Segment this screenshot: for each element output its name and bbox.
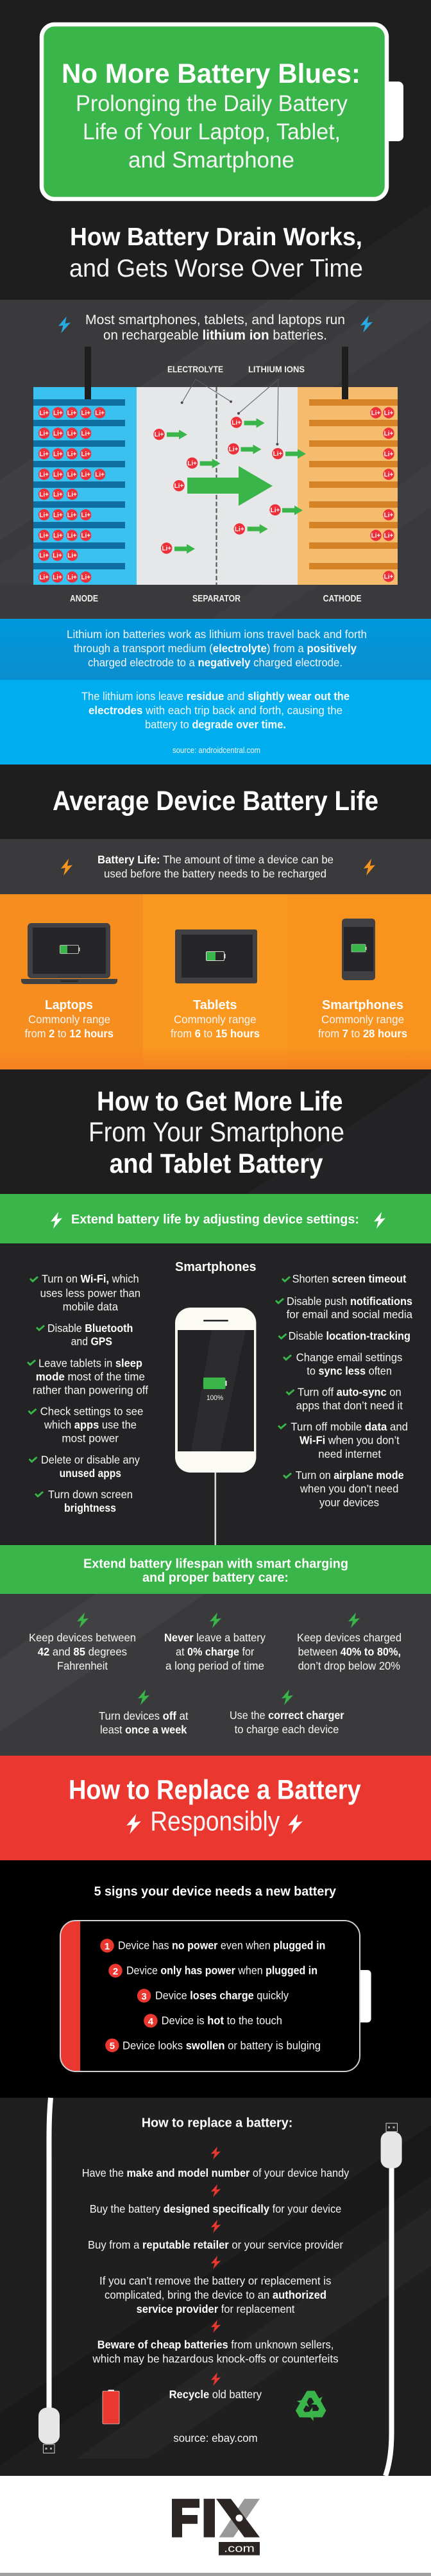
sign 2: 2	[113, 1966, 118, 1977]
right checklist: Turn off mobile data and	[291, 1420, 408, 1433]
separator block	[137, 387, 298, 585]
icon: white bolt right	[374, 1212, 385, 1229]
definition text: used before the battery needs to be recharged	[104, 867, 326, 880]
heading: how battery drain works: How Battery Drain Works,	[70, 223, 362, 251]
cathode block	[298, 387, 398, 585]
anode lithium ions: Li+	[53, 533, 63, 539]
diagram labels: SEPARATOR	[192, 593, 241, 604]
banner: adjust device settings	[0, 1194, 431, 1243]
moving ions with arrows: Li+	[232, 420, 241, 426]
anode lithium ions: Li+	[39, 552, 49, 560]
icon: tablet	[175, 929, 257, 983]
anode lithium ions: Li+	[39, 533, 49, 539]
heading: how to get more life	[0, 1069, 431, 1194]
smartphones text: Smartphones	[322, 998, 403, 1012]
definition text: Battery Life: The amount of time a device can be	[97, 853, 334, 866]
icon: blue bolt right	[360, 316, 373, 333]
tip: correct charger: Use the correct charger	[230, 1709, 344, 1722]
tip: charge range	[297, 1612, 401, 1672]
moving ions with arrows: Li+	[174, 483, 184, 490]
separator dashed line	[216, 387, 217, 585]
cathode lithium ions: Li+	[371, 533, 381, 539]
right checklist: your devices	[319, 1496, 379, 1508]
smartphones text	[318, 998, 407, 1040]
right checklist: for email and social media	[287, 1308, 412, 1321]
left checklist: rather than powering off	[33, 1383, 148, 1396]
source: source: ebay.com	[173, 2432, 258, 2444]
icon: white phone	[175, 1308, 256, 1473]
cathode lithium ions: Li+	[384, 430, 394, 438]
tip: temperature: 42 and 85 degrees	[38, 1645, 127, 1658]
banner: smart charging	[0, 1545, 431, 1594]
terminals	[85, 347, 348, 399]
left checklist: Disable Bluetooth	[47, 1322, 133, 1335]
title text	[62, 58, 360, 173]
icon: recycle symbol	[292, 2390, 329, 2424]
sign 4: 4	[148, 2016, 154, 2027]
tip: turn off weekly	[99, 1690, 189, 1736]
banner text: Extend battery life by adjusting device settings:	[71, 1213, 359, 1227]
step 4: If you can’t remove the battery or replacement is	[99, 2274, 332, 2287]
anode lithium ions: Li+	[67, 492, 77, 498]
heading: how to get more life: How to Get More Life	[97, 1086, 342, 1117]
anode plates	[33, 399, 125, 569]
anode lithium ions: Li+	[67, 471, 77, 479]
left checklist: Leave tablets in sleep	[38, 1356, 142, 1369]
anode lithium ions: Li+	[53, 410, 63, 417]
laptops text: Laptops	[45, 998, 93, 1012]
cathode lithium ions: Li+	[371, 410, 381, 417]
heading: average device battery life	[0, 765, 431, 839]
moving ions with arrows: Li+	[235, 526, 244, 533]
panel: how lithium ion batteries work: through a transport medium (electrolyte) from a positively	[74, 642, 357, 655]
charging cable	[214, 1473, 216, 1545]
tip: temperature	[29, 1612, 136, 1672]
intro text: Most smartphones, tablets, and laptops run	[85, 313, 345, 327]
panel: electrode wear: battery to degrade over time.	[145, 718, 286, 731]
anode lithium ions: Li+	[39, 430, 49, 438]
diagram labels: CATHODE	[323, 593, 362, 604]
anode lithium ions: Li+	[95, 410, 105, 417]
right checklist: Turn on airplane mode	[296, 1469, 404, 1482]
anode lithium ions: Li+	[53, 574, 62, 582]
right checklist: Disable push notifications	[287, 1295, 412, 1308]
laptops text: from 2 to 12 hours	[24, 1027, 114, 1040]
tip: never zero charge: Never leave a battery	[164, 1631, 266, 1644]
icon: smartphone	[342, 919, 375, 980]
definition text	[97, 853, 334, 880]
signs heading: 5 signs your device needs a new battery	[94, 1885, 337, 1899]
source: source: androidcentral.com	[173, 745, 260, 755]
step 5: Beware of cheap batteries from unknown sellers,	[97, 2338, 334, 2351]
anode lithium ions: Li+	[67, 512, 77, 519]
tip: charge range: Keep devices charged	[297, 1631, 401, 1644]
left checklist: unused apps	[60, 1467, 121, 1480]
anode lithium ions: Li+	[67, 552, 77, 560]
icon: orange bolt right	[364, 859, 375, 876]
anode lithium ions: Li+	[81, 512, 90, 519]
cathode lithium ions: Li+	[384, 451, 394, 458]
smartphones text: Commonly range	[321, 1013, 404, 1026]
banner: smart charging: and proper battery care:	[142, 1571, 289, 1585]
tip: temperature: Fahrenheit	[57, 1659, 108, 1672]
left checklist: brightness	[64, 1501, 116, 1514]
tip: never zero charge: at 0% charge for	[176, 1645, 255, 1658]
leader lines	[181, 379, 278, 445]
sign 5: Device looks swollen or battery is bulging	[123, 2039, 321, 2052]
right checklist: Change email settings	[296, 1351, 403, 1363]
icon: white phone: 100%	[207, 1394, 223, 1402]
logo: FIX.com	[172, 2499, 260, 2555]
sign 1: Device has no power even when plugged in	[118, 1939, 325, 1952]
anode lithium ions: Li+	[39, 574, 49, 582]
moving ions with arrows: Li+	[229, 446, 239, 453]
step 4	[99, 2256, 332, 2315]
right checklist: Wi-Fi when you don’t	[300, 1434, 400, 1447]
panel: how lithium ion batteries work	[0, 619, 431, 680]
anode lithium ions: Li+	[53, 471, 63, 479]
icon: white bolt left	[126, 1814, 141, 1834]
banner: smart charging: Extend battery lifespan with smart charging	[83, 1557, 348, 1571]
panel: how lithium ion batteries work: charged electrode to a negatively charged electrode.	[88, 656, 342, 669]
diagram labels	[70, 364, 362, 604]
anode lithium ions: Li+	[53, 430, 63, 438]
panel: lithium ion diagram	[0, 300, 431, 619]
anode lithium ions: Li+	[39, 512, 49, 519]
left checklist: and GPS	[71, 1335, 112, 1348]
smartphones text: from 7 to 28 hours	[318, 1027, 407, 1040]
anode lithium ions: Li+	[81, 410, 90, 417]
heading: how battery drain works: and Gets Worse Over Time	[69, 255, 363, 282]
title battery	[42, 24, 403, 199]
panel: device battery life columns	[0, 894, 431, 1069]
left checklist: Turn down screen	[48, 1488, 133, 1501]
anode lithium ions: Li+	[67, 533, 77, 539]
cathode lithium ions: Li+	[384, 410, 394, 417]
right checklist: Turn off auto-sync on	[298, 1385, 401, 1398]
anode lithium ions: Li+	[81, 533, 90, 539]
sign 4: Device is hot to the touch	[162, 2014, 282, 2027]
tip: charge range: don’t drop below 20%	[298, 1659, 400, 1672]
panel: electrode wear: The lithium ions leave residue and slightly wear out the	[81, 690, 350, 703]
heading: how to replace a battery responsibly: How to Replace a Battery	[69, 1775, 361, 1806]
left checklist	[27, 1272, 148, 1514]
anode lithium ions: Li+	[39, 451, 49, 458]
sign 3: 3	[141, 1991, 147, 2002]
step 3	[88, 2220, 343, 2251]
cathode plates	[309, 399, 398, 569]
icon: white bolt right	[288, 1814, 303, 1834]
cathode lithium ions	[370, 407, 394, 582]
diagram labels: LITHIUM IONS	[248, 364, 305, 374]
cathode lithium ions: Li+	[384, 512, 394, 519]
step 4: complicated, bring the device to an authorized	[105, 2288, 326, 2301]
anode lithium ions: Li+	[67, 451, 77, 458]
icon: red battery	[103, 2390, 119, 2424]
tablets text: from 6 to 15 hours	[171, 1027, 260, 1040]
moving ions with arrows: Li+	[187, 460, 197, 467]
title text: and Smartphone	[128, 148, 294, 173]
cathode lithium ions: Li+	[384, 574, 394, 580]
icon: blue bolt left	[58, 316, 71, 333]
usb plug left	[38, 2408, 60, 2453]
left checklist: most power	[62, 1432, 119, 1445]
icon: laptop	[21, 923, 117, 984]
tip: never zero charge	[164, 1612, 266, 1672]
moving ions with arrows: Li+	[273, 451, 283, 458]
right checklist: Disable location-tracking	[289, 1329, 410, 1342]
anode lithium ions: Li+	[81, 471, 90, 479]
panel: header background	[0, 0, 431, 300]
panel: five signs	[0, 1860, 431, 2098]
tip: charge range: between 40% to 80%,	[298, 1645, 401, 1658]
step 6: Recycle old battery	[169, 2388, 262, 2401]
anode block	[33, 387, 137, 585]
step 3: Buy from a reputable retailer or your service provider	[88, 2238, 343, 2251]
right checklist: need internet	[318, 1448, 381, 1460]
right checklist: apps that don’t need it	[296, 1399, 403, 1412]
panel: how lithium ion batteries work: Lithium ion batteries work as lithium ions travel back and forth	[67, 628, 367, 641]
step 2: Buy the battery designed specifically for your device	[90, 2202, 341, 2215]
cathode lithium ions: Li+	[384, 471, 394, 479]
intro text	[85, 313, 345, 343]
cable right	[385, 2167, 391, 2476]
cathode lithium ions: Li+	[384, 533, 394, 539]
title text: Prolonging the Daily Battery	[76, 91, 348, 116]
anode lithium ions	[38, 407, 105, 583]
tip: temperature: Keep devices between	[29, 1631, 136, 1644]
step 1	[82, 2147, 350, 2179]
tablets text: Commonly range	[174, 1013, 257, 1026]
left checklist: mobile data	[63, 1301, 118, 1313]
tip: correct charger	[230, 1690, 344, 1736]
panel: electrode wear	[0, 680, 431, 765]
anode lithium ions: Li+	[81, 574, 90, 582]
left checklist: Check settings to see	[40, 1405, 143, 1418]
panel: how to replace steps	[0, 2098, 431, 2476]
right checklist	[275, 1272, 412, 1508]
diagram labels: ANODE	[70, 593, 98, 604]
moving ions with arrows: Li+	[162, 546, 171, 552]
sign 5: 5	[110, 2041, 115, 2052]
anode lithium ions: Li+	[53, 552, 62, 560]
panel: footer	[0, 2476, 431, 2576]
anode lithium ions: Li+	[67, 410, 77, 417]
step 4: service provider for replacement	[137, 2303, 295, 2315]
heading: how to get more life: and Tablet Battery	[110, 1148, 323, 1179]
icon: white bolt left	[51, 1212, 62, 1229]
left checklist: Turn on Wi-Fi, which	[42, 1272, 139, 1285]
battery outline with red charge	[60, 1921, 371, 2071]
step 6	[169, 2373, 262, 2401]
anode lithium ions: Li+	[67, 430, 77, 438]
cable left	[49, 2098, 51, 2408]
logo: FIX.com: .com	[224, 2542, 255, 2555]
tablets text	[171, 998, 260, 1040]
heading: how to get more life: From Your Smartphone	[89, 1117, 344, 1148]
icon: orange bolt left	[61, 859, 72, 876]
sign 1: 1	[105, 1941, 110, 1952]
step 5	[92, 2320, 339, 2365]
left checklist: which apps use the	[44, 1419, 137, 1431]
right checklist: Shorten screen timeout	[292, 1272, 407, 1285]
anode lithium ions: Li+	[53, 451, 63, 458]
laptops text	[24, 998, 114, 1040]
usb plug right	[381, 2123, 402, 2168]
left checklist: uses less power than	[40, 1287, 140, 1300]
anode lithium ions: Li+	[81, 430, 90, 438]
right checklist: to sync less often	[307, 1364, 392, 1377]
steps heading: How to replace a battery:	[142, 2116, 292, 2130]
heading: how battery drain works	[69, 223, 363, 282]
anode lithium ions: Li+	[53, 492, 63, 498]
panel: smartphone settings	[0, 1243, 431, 1545]
panel: battery life definition	[0, 839, 431, 894]
diagram labels: ELECTROLYTE	[167, 364, 223, 374]
title text: Life of Your Laptop, Tablet,	[83, 119, 341, 144]
tip: correct charger: to charge each device	[235, 1723, 339, 1736]
tip: turn off weekly: Turn devices off at	[99, 1709, 189, 1722]
anode lithium ions: Li+	[39, 410, 49, 417]
anode lithium ions: Li+	[95, 471, 105, 479]
moving ions with arrows: Li+	[271, 507, 280, 514]
tip: never zero charge: a long period of time	[165, 1659, 264, 1672]
title text: No More Battery Blues:	[62, 58, 360, 89]
anode lithium ions: Li+	[81, 451, 90, 458]
sign 2: Device only has power when plugged in	[126, 1964, 317, 1977]
smartphones heading: Smartphones	[175, 1260, 257, 1274]
tablets text: Tablets	[193, 998, 237, 1012]
left checklist: Delete or disable any	[41, 1453, 140, 1466]
left checklist: mode most of the time	[36, 1370, 145, 1383]
heading: average device battery life: Average Device Battery Life	[53, 786, 378, 817]
laptops text: Commonly range	[28, 1013, 110, 1026]
heading: how to replace a battery responsibly	[0, 1756, 431, 1860]
anode lithium ions: Li+	[39, 471, 49, 479]
panel: battery care tips	[0, 1594, 431, 1756]
moving ions with arrows: Li+	[155, 431, 164, 438]
step 5: which may be hazardous knock-offs or counterfeits	[92, 2352, 339, 2365]
step 2	[90, 2184, 341, 2215]
sign 3: Device loses charge quickly	[155, 1989, 289, 2001]
big green arrow	[187, 466, 273, 506]
intro text: on rechargeable lithium ion batteries.	[103, 328, 327, 343]
panel: electrode wear: electrodes with each trip back and forth, causing the	[89, 704, 342, 717]
moving ions with arrows	[153, 417, 306, 554]
right checklist: when you don’t need	[300, 1482, 398, 1495]
anode lithium ions: Li+	[67, 574, 77, 582]
step 1: Have the make and model number of your device handy	[82, 2166, 350, 2179]
tip: turn off weekly: least once a week	[100, 1724, 187, 1736]
heading: how to replace a battery responsibly: Responsibly	[150, 1806, 280, 1837]
anode lithium ions: Li+	[53, 512, 63, 519]
anode lithium ions: Li+	[39, 492, 49, 498]
